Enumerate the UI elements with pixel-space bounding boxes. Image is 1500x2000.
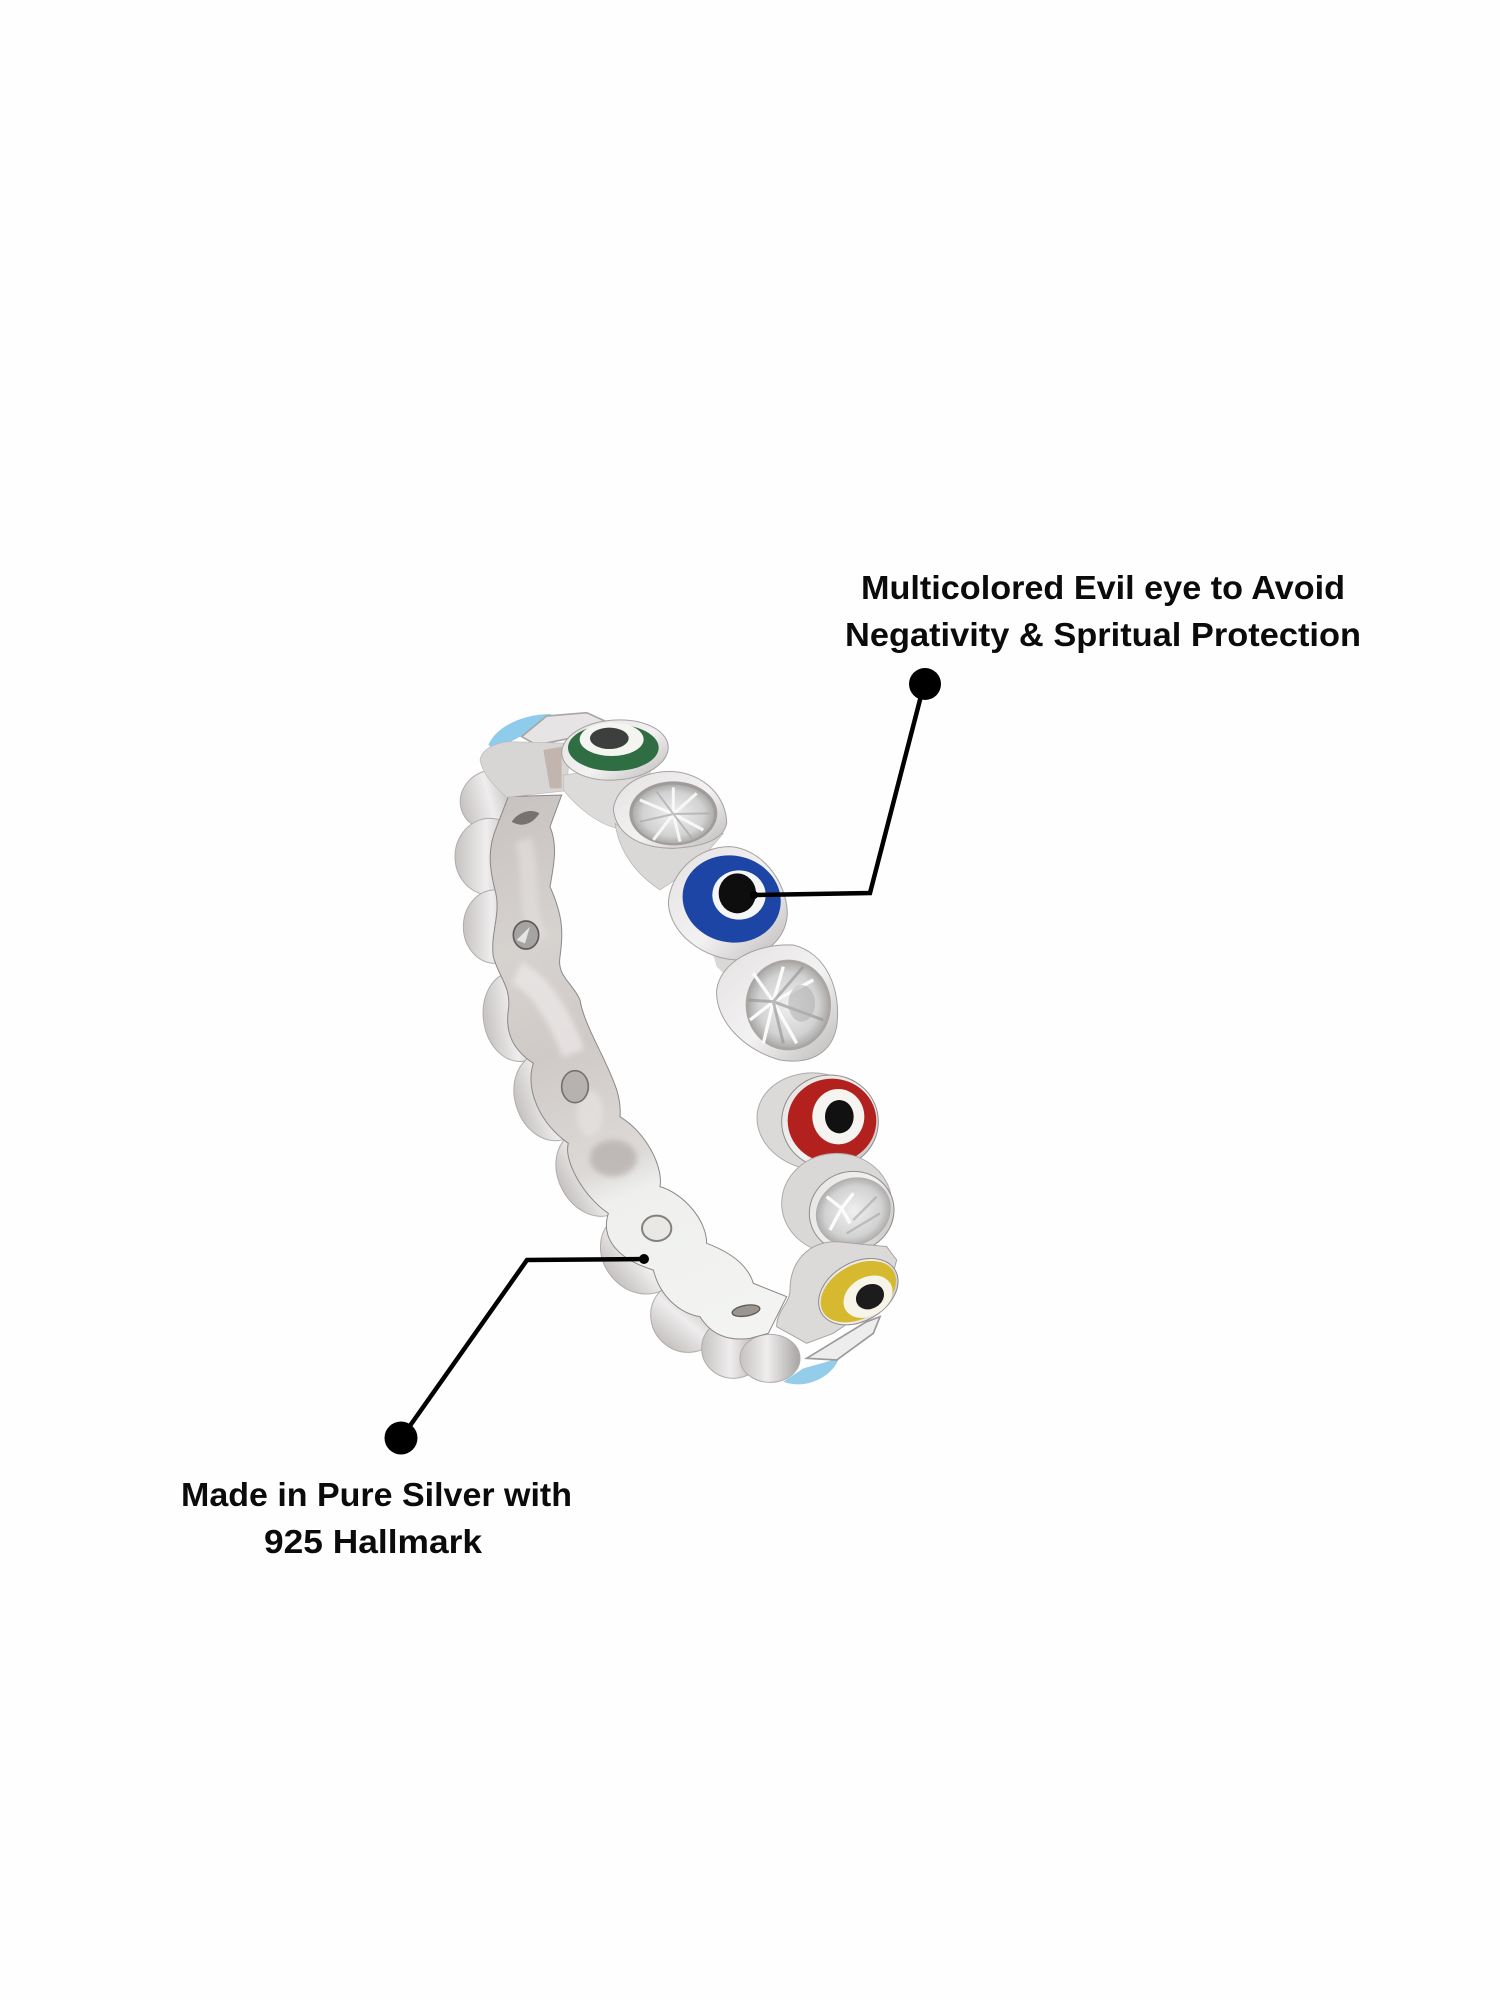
callout text: silver: 925 Hallmark <box>264 1523 483 1560</box>
body under green eye <box>563 763 653 828</box>
clear stone 2 <box>717 945 838 1061</box>
callout text: evil eye <box>845 569 1361 653</box>
band shading <box>517 840 637 1177</box>
callout: evil eye leader line <box>750 668 941 899</box>
outer band lobes <box>453 762 800 1382</box>
callout: silver leader line <box>384 1254 649 1454</box>
clear stone 1 <box>613 772 727 848</box>
callout text: evil eye: Negativity & Spritual Protection <box>845 616 1361 653</box>
top turquoise eye and baguette <box>480 713 610 797</box>
ring photo illustration <box>453 713 910 1384</box>
yellow evil eye <box>777 1242 910 1343</box>
blue evil eye <box>668 846 789 960</box>
inner band surface <box>490 795 787 1339</box>
clear stone 3 <box>782 1153 905 1264</box>
band stone holes <box>512 811 761 1318</box>
bottom baguette and turquoise eye <box>783 1317 880 1384</box>
callout text: silver <box>181 1476 572 1560</box>
green evil eye <box>560 716 670 784</box>
body under first clear stone <box>615 823 723 890</box>
red evil eye <box>749 1064 884 1180</box>
callout text: evil eye: Multicolored Evil eye to Avoid <box>861 569 1345 606</box>
body under blue eye <box>710 943 773 983</box>
callout text: silver: Made in Pure Silver with <box>181 1476 572 1513</box>
